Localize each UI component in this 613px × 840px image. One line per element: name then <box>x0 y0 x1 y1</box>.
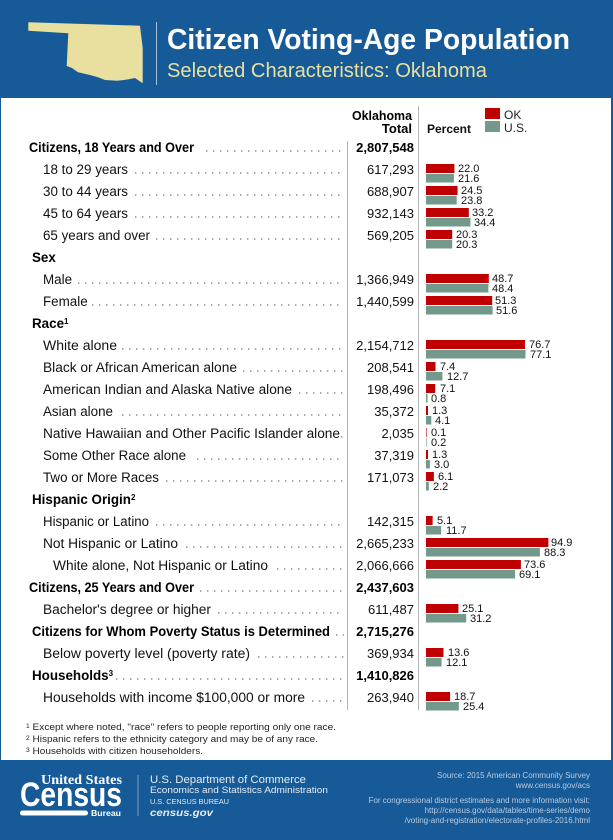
row: Hispanic or Latino: 5.1 <box>437 515 452 527</box>
row: Not Hispanic or Latino: Not Hispanic or Latino <box>43 536 178 551</box>
heading: Race: Race <box>32 316 64 331</box>
agency text: Economics and Statistics Administration <box>150 785 328 796</box>
row: Male: 48.4 <box>492 283 513 295</box>
source text: Source: 2015 American Community Survey <box>437 771 590 780</box>
footnotes <box>26 722 336 756</box>
agency text: U.S. Department of Commerce <box>150 774 306 786</box>
footnotes: Households with citizen householders. <box>30 746 203 756</box>
row: Below poverty level (poverty rate): Below poverty level (poverty rate) <box>43 646 250 661</box>
source text <box>369 771 591 825</box>
row: 18 to 29 years <box>43 162 479 185</box>
row: 45 to 64 years <box>43 206 495 229</box>
row: American Indian and Alaska Native alone: 198,496 <box>367 382 414 397</box>
row: Bachelor's degree or higher: 611,487 <box>368 602 414 617</box>
row: 30 to 44 years: 688,907 <box>367 184 414 199</box>
row: 30 to 44 years: 24.5 <box>461 185 482 197</box>
row: Some Other Race alone: 3.0 <box>434 459 449 471</box>
row: Asian alone: 1.3 <box>432 405 447 417</box>
footnotes: Except where noted, "race" refers to people reporting only one race. <box>30 722 336 732</box>
row: White alone <box>43 338 551 361</box>
header: state shape <box>28 22 143 83</box>
row: Hispanic or Latino <box>43 514 467 537</box>
row: Not Hispanic or Latino: 88.3 <box>544 547 565 559</box>
row: 65 years and over: 20.3 <box>456 239 477 251</box>
row: Not Hispanic or Latino: 94.9 <box>551 537 572 549</box>
row: 30 to 44 years: 30 to 44 years <box>43 184 128 199</box>
column heading: Oklahoma Total: Oklahoma <box>352 108 413 123</box>
row: Households <box>32 668 414 683</box>
row: Households: Households <box>32 668 109 683</box>
footnotes: 1 <box>26 724 30 730</box>
row: Two or More Races: 2.2 <box>433 481 448 493</box>
row: Households: 3 <box>109 669 114 678</box>
row: 30 to 44 years <box>43 184 482 207</box>
row: 65 years and over: 569,205 <box>367 228 414 243</box>
row: Female: 1,440,599 <box>356 294 414 309</box>
row: Below poverty level (poverty rate): 13.6 <box>448 647 469 659</box>
legend: U.S. <box>504 121 527 135</box>
legend: OK <box>504 108 521 122</box>
row: 18 to 29 years: 21.6 <box>458 173 479 185</box>
row: Native Hawaiian and Other Pacific Islander alone: 0.2 <box>431 437 446 449</box>
row: Native Hawaiian and Other Pacific Islander alone: 2,035 <box>381 426 414 441</box>
row: Citizens, 25 Years and Over: 2,437,603 <box>356 580 414 595</box>
source text: For congressional district estimates and more information visit: <box>369 796 590 805</box>
subtitle: Selected Characteristics: Oklahoma <box>167 60 488 82</box>
row: Citizens, 18 Years and Over <box>29 140 414 155</box>
row: Not Hispanic or Latino <box>43 536 572 559</box>
source text: http://census.gov/data/tables/time-series/demo <box>425 806 591 815</box>
row: Female <box>43 294 517 317</box>
row: American Indian and Alaska Native alone: American Indian and Alaska Native alone <box>43 382 292 397</box>
row: Below poverty level (poverty rate): 12.1 <box>446 657 467 669</box>
row: Bachelor's degree or higher: Bachelor's degree or higher <box>43 602 212 617</box>
row: Some Other Race alone <box>43 448 449 471</box>
row: Two or More Races: 6.1 <box>438 471 453 483</box>
row: Some Other Race alone: 37,319 <box>374 448 414 463</box>
row: White alone: 76.7 <box>529 339 550 351</box>
row: 45 to 64 years: 34.4 <box>474 217 495 229</box>
row: White alone, Not Hispanic or Latino: 69.1 <box>519 569 540 581</box>
row: Hispanic or Latino: 11.7 <box>446 525 467 537</box>
row: Hispanic or Latino: 142,315 <box>367 514 414 529</box>
row: Black or African American alone: 7.4 <box>440 361 455 373</box>
row: Citizens, 25 Years and Over <box>29 580 414 595</box>
row: Below poverty level (poverty rate): 369,934 <box>367 646 414 661</box>
row: Some Other Race alone: Some Other Race alone <box>43 448 186 463</box>
row: Black or African American alone: 12.7 <box>447 371 468 383</box>
row: Citizens, 18 Years and Over: Citizens, 18 Years and Over <box>29 140 195 155</box>
row: 45 to 64 years: 33.2 <box>472 207 493 219</box>
row: 65 years and over: 20.3 <box>456 229 477 241</box>
row: Households with income $100,000 or more: 263,940 <box>367 690 414 705</box>
row: Households with income $100,000 or more: 18.7 <box>454 691 475 703</box>
row: Female: Female <box>43 294 88 309</box>
agency text: U.S. CENSUS BUREAU <box>150 797 229 806</box>
footnotes: Hispanic refers to the ethnicity category and may be of any race. <box>30 734 318 744</box>
row: White alone, Not Hispanic or Latino: 73.6 <box>524 559 545 571</box>
row: Citizens for Whom Poverty Status is Determined: Citizens for Whom Poverty Status is Determined <box>32 624 330 639</box>
header divider <box>156 22 157 85</box>
agency text <box>150 774 328 819</box>
row: Two or More Races <box>43 470 453 493</box>
row: 65 years and over <box>43 228 477 251</box>
row: White alone, Not Hispanic or Latino <box>53 558 545 581</box>
row: Male: 1,366,949 <box>356 272 414 287</box>
row: Citizens, 25 Years and Over: Citizens, 25 Years and Over <box>29 580 195 595</box>
footnotes: 3 <box>26 748 30 754</box>
row: White alone: White alone <box>43 338 117 353</box>
row: 30 to 44 years: 23.8 <box>461 195 482 207</box>
heading: Hispanic Origin: 2 <box>131 493 136 502</box>
row: Asian alone: Asian alone <box>43 404 113 419</box>
row: Some Other Race alone: 1.3 <box>432 449 447 461</box>
row: White alone: 77.1 <box>530 349 551 361</box>
column heading: Oklahoma Total <box>352 108 413 136</box>
row: Not Hispanic or Latino: 2,665,233 <box>356 536 414 551</box>
row: Native Hawaiian and Other Pacific Islander alone <box>43 426 446 449</box>
row: Bachelor's degree or higher: 25.1 <box>462 603 483 615</box>
row: 45 to 64 years: 932,143 <box>367 206 414 221</box>
row: Two or More Races: 171,073 <box>367 470 414 485</box>
row: Asian alone: 4.1 <box>435 415 450 427</box>
row: American Indian and Alaska Native alone: 0.8 <box>431 393 446 405</box>
row: Hispanic or Latino: Hispanic or Latino <box>43 514 149 529</box>
row: Bachelor's degree or higher: 31.2 <box>470 613 491 625</box>
source text: /voting-and-registration/electorate-profiles-2016.html <box>405 816 590 825</box>
title: Citizen Voting-Age Population <box>167 24 570 56</box>
row: Male <box>43 272 513 295</box>
column heading: Percent: Percent <box>427 122 471 136</box>
row: Citizens, 18 Years and Over: 2,807,548 <box>356 140 414 155</box>
row: Bachelor's degree or higher <box>43 602 491 625</box>
row: Citizens for Whom Poverty Status is Determined: 2,715,276 <box>356 624 414 639</box>
row: Male: 48.7 <box>492 273 513 285</box>
footnotes: 2 <box>26 736 30 742</box>
row: White alone: 2,154,712 <box>356 338 414 353</box>
source text: www.census.gov/acs <box>515 781 590 790</box>
row: Households with income $100,000 or more: 25.4 <box>463 701 484 713</box>
legend <box>485 108 527 135</box>
panel: white table background <box>1 98 611 760</box>
logo: United States Census Bureau: United States <box>41 772 122 787</box>
row: 45 to 64 years: 45 to 64 years <box>43 206 128 221</box>
row: American Indian and Alaska Native alone <box>43 382 455 405</box>
row: Female: 51.3 <box>495 295 516 307</box>
column heading: Oklahoma Total: Total <box>382 121 412 136</box>
row: White alone, Not Hispanic or Latino: White alone, Not Hispanic or Latino <box>53 558 268 573</box>
agency text: census.gov <box>150 808 215 819</box>
row: Asian alone <box>43 404 450 427</box>
row: Asian alone: 35,372 <box>374 404 414 419</box>
logo: United States Census Bureau: Bureau <box>91 809 121 818</box>
heading: Sex: Sex <box>32 250 56 265</box>
row: 18 to 29 years: 617,293 <box>367 162 414 177</box>
row: Two or More Races: Two or More Races <box>43 470 159 485</box>
row: Male: Male <box>43 272 72 287</box>
row: American Indian and Alaska Native alone: 7.1 <box>440 383 455 395</box>
logo: United States Census Bureau: Census <box>20 776 122 814</box>
row: Native Hawaiian and Other Pacific Islander alone: 0.1 <box>431 427 446 439</box>
row: Households: 1,410,826 <box>356 668 414 683</box>
row: 18 to 29 years: 22.0 <box>458 163 479 175</box>
row: Below poverty level (poverty rate) <box>43 646 469 669</box>
row: 18 to 29 years: 18 to 29 years <box>43 162 128 177</box>
row: Black or African American alone: 208,541 <box>367 360 414 375</box>
row: Households with income $100,000 or more: Households with income $100,000 or more <box>43 690 305 705</box>
row: 65 years and over: 65 years and over <box>43 228 151 243</box>
row: White alone, Not Hispanic or Latino: 2,066,666 <box>356 558 414 573</box>
heading: Race: 1 <box>64 317 69 326</box>
row: Households with income $100,000 or more <box>43 690 484 713</box>
row: Black or African American alone: Black or African American alone <box>43 360 237 375</box>
row: Black or African American alone <box>43 360 468 383</box>
heading: Hispanic Origin: Hispanic Origin <box>32 492 131 507</box>
row: Female: 51.6 <box>496 305 517 317</box>
row: Native Hawaiian and Other Pacific Islander alone: Native Hawaiian and Other Pacific Islander alone <box>43 426 340 441</box>
